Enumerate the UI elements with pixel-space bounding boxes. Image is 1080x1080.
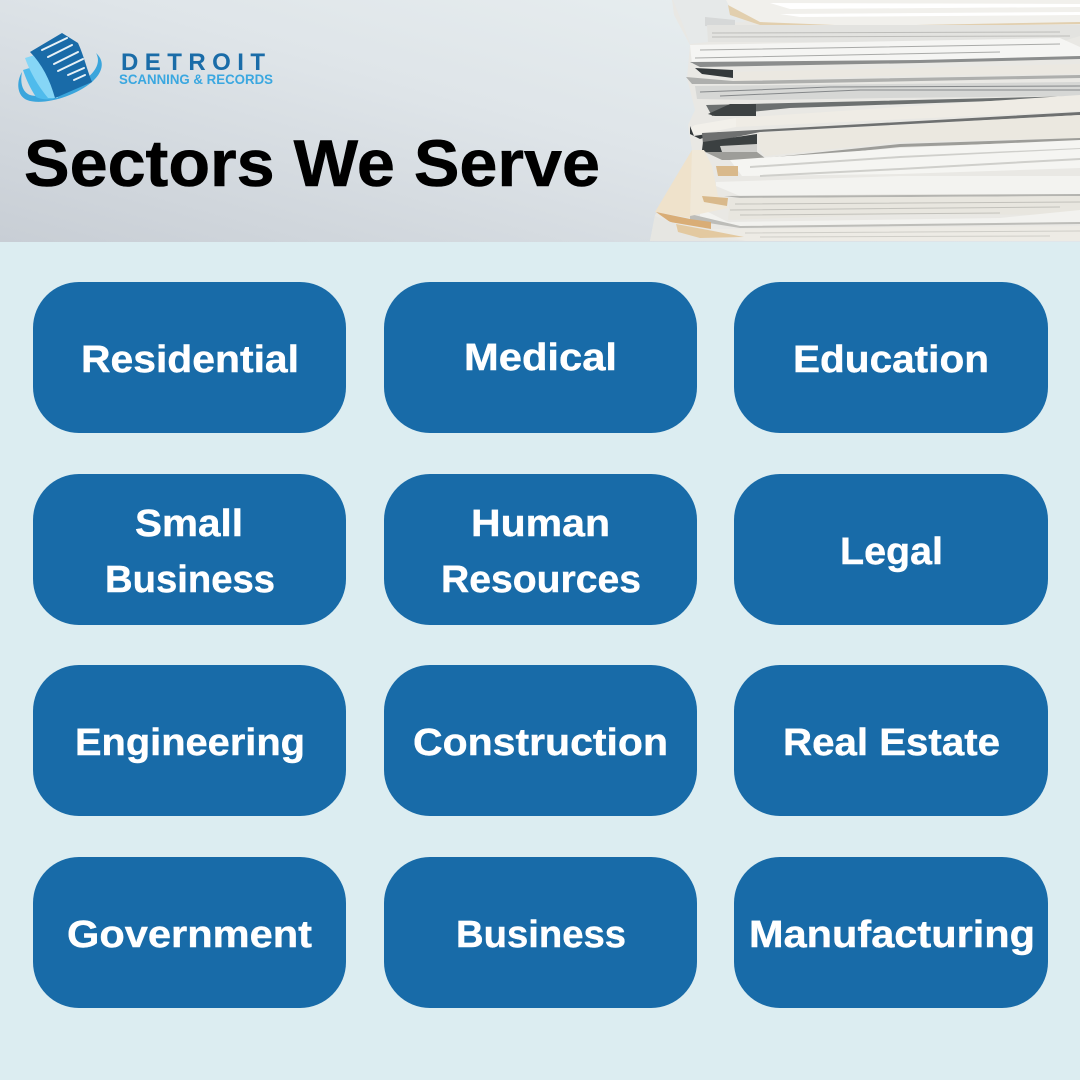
logo [18,33,273,102]
card: Government [33,857,346,1008]
card: Human Resources: Resources [441,559,641,601]
card: Small Business: Business [105,559,275,601]
card: Engineering [33,665,346,816]
card: Real Estate [734,665,1048,816]
photo: stack of paper files [650,0,1080,241]
card: Human Resources [384,474,697,625]
card: Human Resources: Human [471,503,610,545]
header banner [0,0,1080,242]
card: Government: Government [67,914,312,956]
card: Small Business [33,474,346,625]
card: Residential [33,282,346,433]
card: Construction [384,665,697,816]
card: Small Business: Small [135,503,243,545]
logo wordmark: Detroit: DETROIT [121,49,265,76]
sector grid [33,282,1048,1008]
card: Legal [734,474,1048,625]
card: Real Estate: Real Estate [783,722,1000,764]
card: Business [384,857,697,1008]
card: Education: Education [793,339,989,381]
logo icon: document with orbit [18,33,102,102]
card: Medical: Medical [464,337,617,379]
card: Medical [384,282,697,433]
card: Construction: Construction [413,722,668,764]
card: Business: Business [456,914,626,956]
title: Sectors We Serve [24,126,600,200]
logo wordmark: Scanning & Records: SCANNING & RECORDS [119,71,273,87]
card: Manufacturing [734,857,1048,1008]
card: Residential: Residential [81,339,299,381]
card: Education [734,282,1048,433]
card: Legal: Legal [840,531,943,573]
card: Manufacturing: Manufacturing [749,914,1035,956]
card: Engineering: Engineering [75,722,305,764]
